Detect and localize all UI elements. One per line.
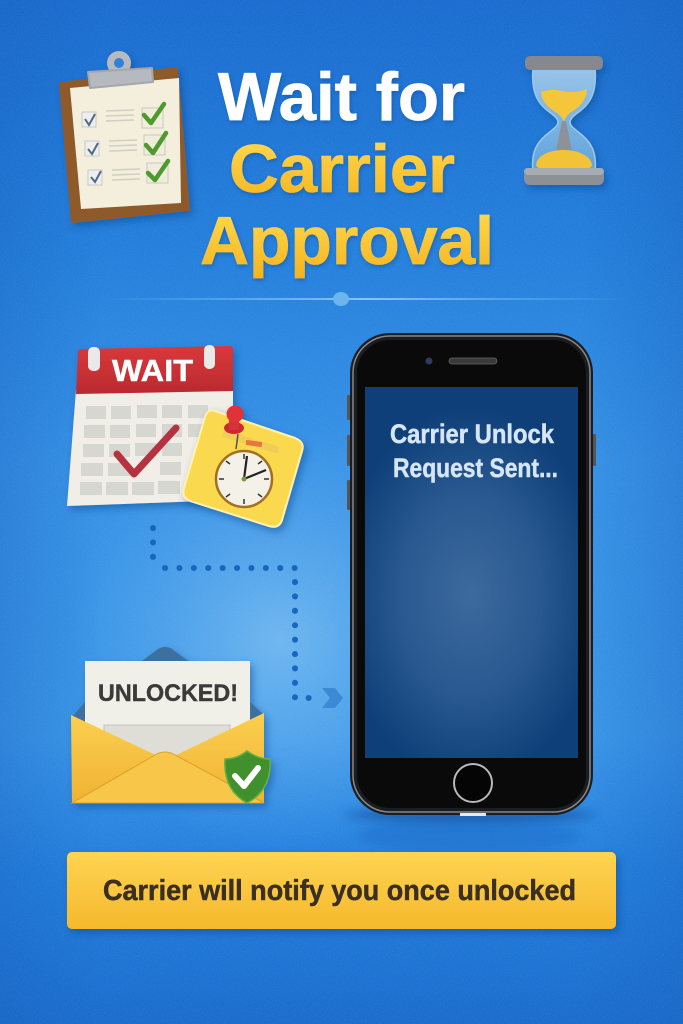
home button: [454, 764, 492, 802]
banner text: Carrier will notify you once unlocked: [103, 875, 576, 907]
camera: [426, 358, 432, 364]
red pin: [224, 406, 244, 449]
phone reflection: [345, 808, 595, 854]
calendar tick: [117, 428, 176, 474]
title line: Wait for: Wait for: [218, 59, 465, 135]
icon: sticky note with clock and pin: [183, 406, 303, 527]
icon: clipboard with checklist: [61, 51, 188, 221]
phone screen: [365, 387, 578, 758]
screen message: [390, 419, 558, 483]
title: [200, 59, 494, 279]
arrow head: [322, 688, 343, 708]
title line: Approval: Approval: [200, 203, 494, 279]
speaker: [449, 358, 497, 364]
calendar label: WAIT: [112, 353, 193, 388]
notification banner: [67, 852, 616, 929]
arrow: dotted path from calendar to phone: [153, 528, 343, 708]
icon: unlocked envelope with shield: [71, 647, 270, 803]
title line: Carrier: Carrier: [229, 131, 455, 207]
letter: [85, 661, 250, 765]
phone: [347, 333, 596, 816]
screen message: Request Sent...: [393, 453, 558, 483]
green shield: [225, 751, 270, 803]
screen message: Carrier Unlock: [390, 419, 555, 449]
icon: wait calendar: [67, 345, 233, 506]
letter text: UNLOCKED!: [98, 680, 238, 707]
icon: hourglass: [524, 56, 604, 185]
